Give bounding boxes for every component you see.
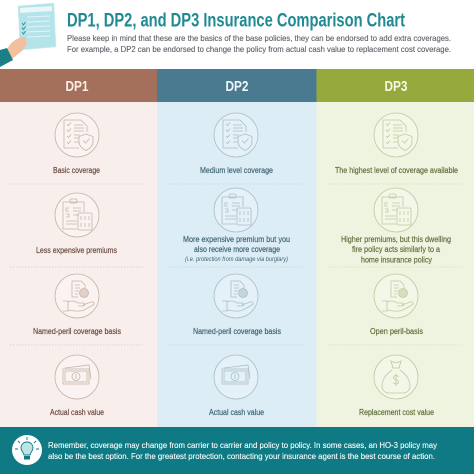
- panel: DP2 column: [157, 69, 316, 427]
- header: DP2: DP2: [226, 79, 248, 95]
- icon: cash: [214, 355, 258, 399]
- text: replacement cost value: Replacement cost value: [359, 408, 434, 417]
- icon: checklist with shield: [374, 113, 418, 157]
- text: medium level coverage: Medium level coverage: [200, 166, 273, 175]
- text: actual cash value: Actual cash value: [209, 408, 264, 417]
- footer text: also be the best option. For the greatest protection, contacting your insurance agent is the best course of action.: [48, 451, 435, 461]
- text: more expensive premium: More expensive premium but you: [183, 235, 290, 244]
- text: higher premiums: home insurance policy: [361, 256, 432, 264]
- illustration: hand holding checklist: [0, 3, 56, 67]
- footer text: [48, 440, 438, 461]
- header: DP1: DP1: [66, 79, 88, 95]
- header: DP1: [0, 69, 157, 102]
- text: basic coverage: Basic coverage: [53, 166, 100, 175]
- text: less expensive premiums: Less expensive premiums: [36, 246, 117, 255]
- text: actual cash value: Actual cash value: [50, 408, 104, 417]
- icon: checklist with shield: [214, 113, 258, 157]
- icon: money bag: [374, 355, 418, 399]
- text: highest level: The highest level of coverage available: [335, 166, 458, 175]
- text: named-peril: Named-peril coverage basis: [193, 327, 281, 336]
- panel: DP1 column: [0, 69, 157, 427]
- panel: DP3 column: [316, 69, 474, 427]
- text: open peril: Open peril-basis: [370, 327, 423, 336]
- text: more expensive premium: [183, 235, 290, 263]
- header: DP3: DP3: [384, 79, 408, 95]
- icon: clipboard with calculator: [214, 188, 258, 232]
- footer banner: [0, 427, 474, 474]
- icon: clipboard with calculator: [374, 188, 418, 232]
- text: higher premiums: [341, 235, 451, 264]
- header: DP3: [316, 69, 474, 102]
- intro text: [67, 33, 451, 54]
- text: named-peril: Named-peril coverage basis: [33, 327, 121, 336]
- icon: clipboard with calculator: [55, 193, 99, 237]
- text: higher premiums: Higher premiums, but this dwelling: [341, 235, 451, 244]
- icon: hand with document: [374, 274, 418, 318]
- header: DP2: [157, 69, 316, 102]
- icon: cash: [55, 355, 99, 399]
- text: more expensive premium: (i.e. protection from damage via burglary): [185, 256, 288, 263]
- icon: hand with document: [55, 274, 99, 318]
- icon: checklist with shield: [55, 113, 99, 157]
- icon: hand with document: [214, 274, 258, 318]
- text: higher premiums: fire policy acts similarly to a: [352, 245, 440, 254]
- icon: light bulb: [12, 435, 42, 465]
- footer text: Remember, coverage may change from carrier to carrier and policy to policy. In some cases, an HO-3 policy may: [48, 440, 438, 450]
- text: more expensive premium: also receive more coverage: [194, 245, 280, 254]
